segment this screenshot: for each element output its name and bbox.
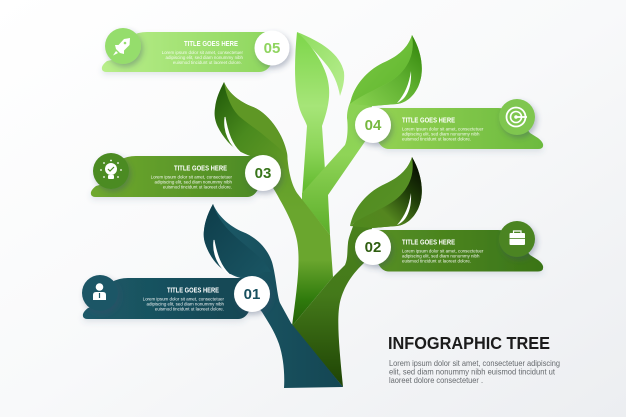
tree illustration <box>204 32 422 388</box>
number badge: 02 <box>365 239 381 256</box>
description: Lorem ipsum dolor sit amet, consectetuer <box>162 50 244 55</box>
description <box>402 248 484 263</box>
branch and leaf: 02 <box>292 157 422 387</box>
white vein: leaf 04 <box>397 71 411 103</box>
description: adipiscing elit, sed diam nonummy nibh <box>402 253 480 258</box>
card 03 <box>91 153 281 197</box>
icon: target <box>499 99 535 135</box>
main description: laoreet dolore consectetuer . <box>389 375 483 385</box>
white vein: leaf 02 <box>397 193 411 225</box>
number badge <box>355 229 391 265</box>
card 01 <box>82 275 270 319</box>
number badge <box>245 155 281 191</box>
trunk and branch: 03 <box>262 153 333 326</box>
main title: INFOGRAPHIC TREE <box>388 333 550 353</box>
band <box>83 278 252 319</box>
number badge <box>234 276 270 312</box>
description: adipiscing elit, sed diam nonummy nibh <box>147 302 225 306</box>
description: euismod tincidunt ut laoreet dolore. <box>402 137 471 142</box>
card 04 <box>355 99 543 149</box>
description: euismod tincidunt ut laoreet dolore. <box>163 184 232 189</box>
description: adipiscing elit, sed diam nonummy nibh <box>155 179 233 184</box>
band <box>91 156 260 197</box>
white vein: leaf 03 <box>225 117 240 152</box>
title: TITLE GOES HERE <box>174 166 227 172</box>
description <box>162 50 244 65</box>
main description: elit, sed diam nonummy nibh euismod tincidunt ut <box>389 366 556 376</box>
main description <box>389 358 560 385</box>
icon: person <box>82 275 118 311</box>
icon: briefcase <box>499 221 535 257</box>
description: euismod tincidunt ut laoreet dolore. <box>173 60 242 65</box>
description: euismod tincidunt ut laoreet dolore. <box>402 258 471 263</box>
description: Lorem ipsum dolor sit amet, consectetuer <box>151 174 233 179</box>
description <box>143 297 225 311</box>
band <box>102 32 272 72</box>
number badge: 03 <box>255 165 271 182</box>
card 05 <box>102 28 289 72</box>
description: euismod tincidunt ut laoreet dolore. <box>155 306 224 311</box>
band <box>374 230 543 272</box>
stem and leaf: top centre <box>295 32 329 197</box>
branch and leaf: 04 <box>302 35 422 235</box>
number badge: 05 <box>264 40 280 57</box>
description <box>402 127 484 142</box>
leaf: back of top leaf <box>297 32 344 96</box>
icon: rocket <box>105 28 141 64</box>
description: Lorem ipsum dolor sit amet, consectetuer <box>402 127 484 132</box>
main description: Lorem ipsum dolor sit amet, consectetuer adipiscing <box>389 358 560 368</box>
number badge <box>254 30 290 66</box>
description: Lorem ipsum dolor sit amet, consectetuer <box>143 297 225 302</box>
title: TITLE GOES HERE <box>402 240 455 246</box>
title: TITLE GOES HERE <box>184 41 238 48</box>
title: TITLE GOES HERE <box>167 288 219 294</box>
description: adipiscing elit, sed diam nonummy nibh <box>166 55 244 60</box>
icon: light bulb <box>93 153 129 189</box>
number badge <box>355 107 391 143</box>
band <box>374 108 543 149</box>
trunk and leaf: 01 <box>204 204 343 388</box>
card 02 <box>355 221 543 272</box>
number badge: 04 <box>365 117 382 134</box>
description: Lorem ipsum dolor sit amet, consectetuer <box>402 248 484 253</box>
number badge: 01 <box>244 286 260 303</box>
title: TITLE GOES HERE <box>402 118 455 124</box>
description <box>151 174 233 189</box>
description: adipiscing elit, sed diam nonummy nibh <box>402 132 480 137</box>
white vein: leaf 01 <box>214 240 229 274</box>
leaf: 03 <box>215 82 287 170</box>
